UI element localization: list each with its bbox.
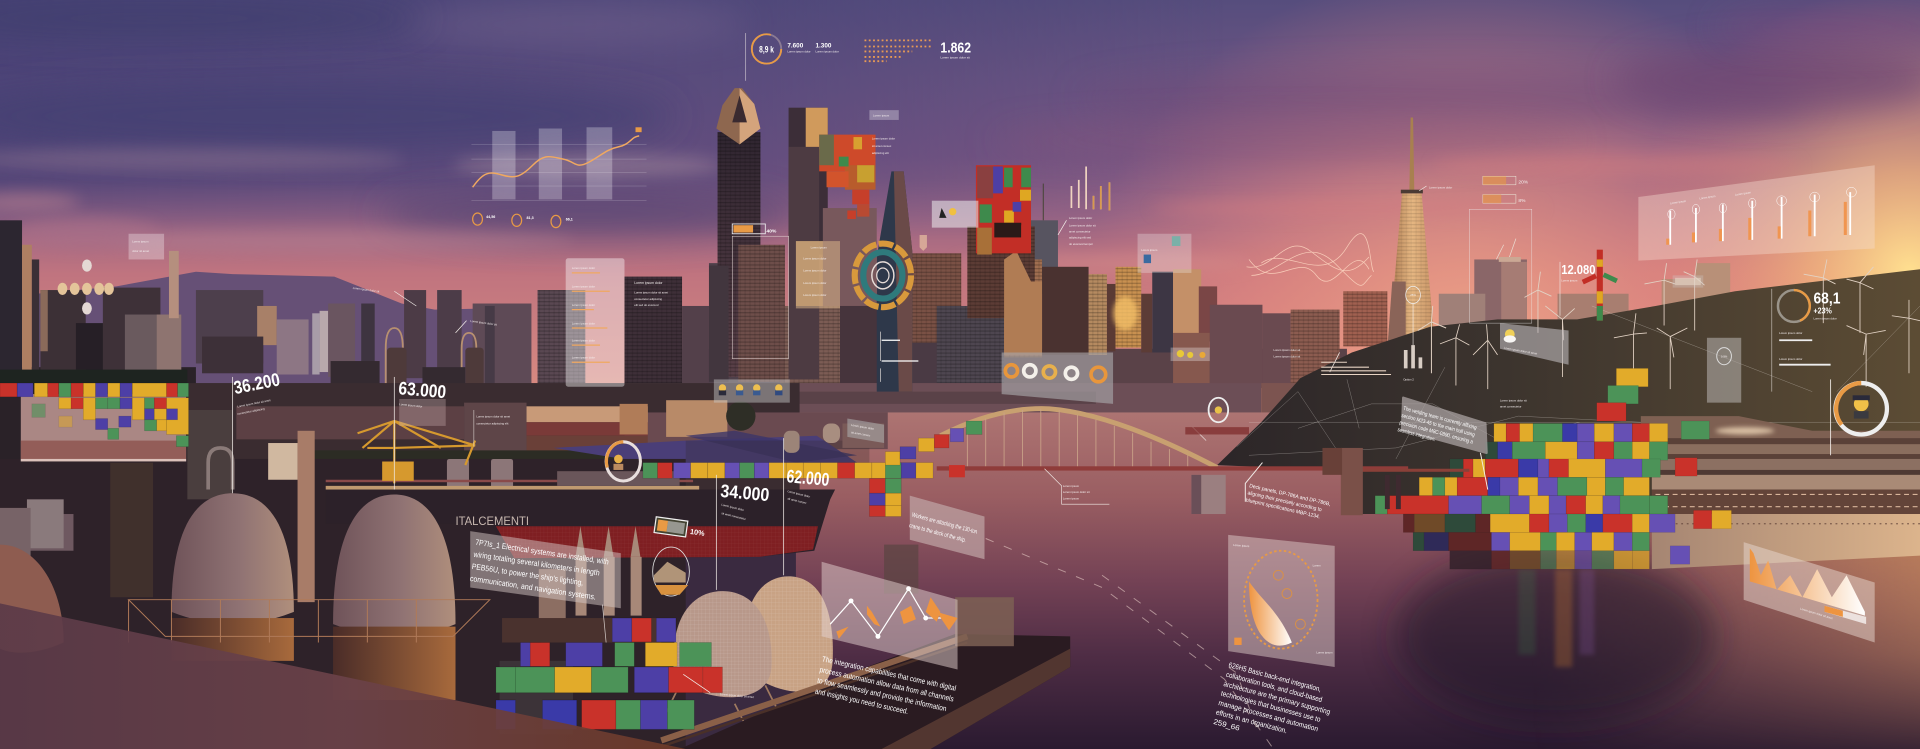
note card <box>129 234 164 259</box>
leader line <box>745 33 747 81</box>
gauges <box>473 213 573 228</box>
speech callout: The welding team is currently affixing <box>1402 406 1477 431</box>
small card: Lorem ipsum dolor <box>851 423 874 431</box>
text block: consectetur adipiscing <box>634 297 662 301</box>
panel: Lorem ipsum dolor <box>803 281 827 285</box>
panel: circular gauge: Lorem ipsum <box>1316 651 1333 655</box>
avatar ring <box>1831 379 1887 455</box>
stat 7.600: 7.600 <box>787 43 804 50</box>
panel: Lorem ipsum dolor <box>803 293 827 297</box>
balloon <box>920 235 927 251</box>
HUD: line chart with bars <box>471 127 647 228</box>
note: back-end integration: 259_66 <box>1212 717 1241 733</box>
mountain gauge <box>653 547 689 596</box>
HUD: hill panels <box>1397 275 1887 490</box>
tower: mid skyscrapers <box>789 108 1042 392</box>
gauge panel: 0.9% <box>1721 354 1728 358</box>
label on lego pile <box>683 674 754 699</box>
stat 1.862: Lorem ipsum dolor sit <box>940 56 970 60</box>
speech callout: section M23-45 to the main hull using <box>1400 413 1475 438</box>
note card: Lorem ipsum <box>132 239 149 243</box>
donut panel <box>1002 352 1113 404</box>
gas domes <box>0 493 490 700</box>
note: integration capabilities: to flow seamlessly and provide the information <box>816 676 947 713</box>
mountains <box>37 272 514 386</box>
HUD: bars & text near lego tower <box>1058 166 1414 382</box>
wind turbines <box>1418 259 1920 389</box>
note: back-end integration: technologies that businesses use to <box>1220 689 1322 724</box>
note: back-end integration: architecture are the primary supporting <box>1223 679 1331 716</box>
lego island stack <box>1375 368 1731 569</box>
panel: Lorem ipsum dolor <box>803 256 827 260</box>
lego facade on tower <box>819 135 876 219</box>
progress bars <box>882 340 918 361</box>
panel: map line chart <box>822 562 958 669</box>
text block: Lorem ipsum dolor sit amet <box>634 291 668 295</box>
text callout: Lorem ipsum dolor sit <box>1273 354 1300 358</box>
ring <box>1406 286 1420 348</box>
panel: Lorem ipsum <box>811 245 827 249</box>
stat 7.600: Lorem ipsum dolor <box>787 50 811 54</box>
panel: list with sliders: Lorem ipsum dolor <box>572 266 595 270</box>
panel: list with sliders: Lorem ipsum dolor <box>572 356 595 360</box>
note: amet consectetur <box>1500 405 1522 409</box>
text: adipiscing elit <box>872 151 889 155</box>
KPI: 34.000: Lorem ipsum dolor <box>721 503 744 512</box>
spire label: Lorem ipsum dolor <box>1429 185 1452 189</box>
HUD panel: top right bar chart: Lorem ipsum <box>1670 199 1687 205</box>
speech callout: seamless integration. <box>1397 427 1436 443</box>
row 7 <box>1413 532 1649 551</box>
KPI: 36.200 <box>232 369 282 493</box>
speech callout <box>1397 398 1488 490</box>
battery 10% <box>654 517 706 540</box>
foreground translucent panel <box>0 603 686 749</box>
stat 1.300: Lorem ipsum dolor <box>816 50 839 54</box>
row 2 <box>1485 442 1668 460</box>
wire-frame spheres <box>661 576 833 728</box>
batteries: 20% <box>1518 180 1529 186</box>
note: integration capabilities: The integration capabilities that come with digital <box>821 654 957 693</box>
gauges: 44,56 <box>486 215 495 219</box>
lego pile <box>496 618 722 729</box>
note <box>1500 398 1527 409</box>
panel: list with sliders: Lorem ipsum dolor <box>572 285 595 289</box>
note: integration capabilities: and insights you need to succeed. <box>814 687 909 716</box>
stat 68,1: Lorem ipsum dolor <box>1813 316 1837 320</box>
card: Lorem ipsum <box>873 113 890 117</box>
HUD panel: top right bar chart: Lorem ipsum <box>1735 190 1752 197</box>
panel: workers note <box>908 496 984 559</box>
mini avatar <box>1209 398 1228 422</box>
small text <box>474 410 510 447</box>
tower: spire skyscraper <box>1387 117 1435 349</box>
bridge annotations: Lorem ipsum <box>1063 484 1080 488</box>
small text: consectetur adipiscing elit <box>476 422 509 426</box>
stat 1.300: 1.300 <box>816 43 832 50</box>
KPI: 36.200: Lorem ipsum dolor sit amet <box>237 398 271 409</box>
row 8 <box>1450 551 1649 569</box>
note: back-end integration: manage processes and automation <box>1218 698 1319 733</box>
stat 1.300 <box>816 43 839 54</box>
stat 68,1 <box>1772 289 1841 392</box>
text callout: Lorem ipsum dolor sit <box>1273 348 1300 352</box>
lego cross on hillside <box>1582 250 1618 321</box>
chemical tanks <box>331 328 484 392</box>
12.080: Lorem ipsum <box>1561 278 1578 282</box>
port crane <box>358 421 475 483</box>
battery 10%: 10% <box>689 527 706 538</box>
dot matrix <box>864 40 931 61</box>
bridge annotations: Lorem ipsum dolor sit <box>1063 490 1090 494</box>
row 4 <box>1419 477 1649 496</box>
label on lego pile: Lorem ipsum dolor sit amet <box>720 692 754 699</box>
stat 1.862: 1.862 <box>940 41 971 57</box>
KPI: 62.000: 62.000 <box>786 465 830 490</box>
12.080 <box>1560 262 1596 316</box>
clouds <box>0 0 1920 273</box>
frame <box>1469 209 1532 323</box>
bulb gauges <box>58 259 114 315</box>
panel: workers note: crane to the deck of the ship. <box>908 522 967 544</box>
panel: list with sliders: Lorem ipsum dolor <box>572 303 595 307</box>
panel: list with sliders <box>566 258 624 387</box>
battery <box>732 224 777 235</box>
cargo ship <box>326 471 835 558</box>
cruise ship <box>1641 416 1920 569</box>
sky background <box>0 0 1920 412</box>
spire label <box>1419 185 1452 191</box>
panel: circular gauge <box>1228 535 1335 667</box>
KPI: 34.000: 34.000 <box>720 480 770 505</box>
note: back-end integration <box>1212 660 1336 749</box>
ring: 25% <box>1410 293 1416 297</box>
text: Lorem ipsum dolor sit <box>1069 223 1096 227</box>
panel: electrical systems note: communication, and navigation systems. <box>469 574 597 602</box>
avatar <box>606 442 640 481</box>
radial dial <box>855 244 911 307</box>
icon panel <box>1171 348 1210 361</box>
small text: Lorem ipsum dolor sit amet <box>476 414 510 418</box>
dock platform <box>661 545 1070 749</box>
stat 7.600 <box>787 43 811 54</box>
text: Lorem ipsum dolor <box>1069 216 1092 220</box>
gauges: 66,1 <box>566 217 573 221</box>
HUD: callouts near left city <box>58 234 668 387</box>
bridge piers <box>1191 448 1401 515</box>
bridge annotations <box>1044 427 1331 522</box>
crane building <box>1496 239 1521 262</box>
city skyline: central towers <box>624 184 1730 415</box>
panel: area chart: Lorem ipsum dolor sit amet <box>1800 607 1833 620</box>
frame <box>732 236 789 359</box>
panel: Lorem ipsum dolor <box>803 269 827 273</box>
panel: electrical systems note: 7P7Is_1 Electrical systems are installed, with <box>475 538 609 566</box>
left factory ground <box>0 410 686 749</box>
note: back-end integration: efforts in an organization. <box>1215 708 1288 735</box>
text <box>1058 216 1096 246</box>
row 6 <box>1403 514 1675 532</box>
lego tower top <box>976 165 1031 255</box>
small card <box>847 419 884 443</box>
panel: circular gauge: Lorem <box>1313 564 1321 568</box>
mini bars <box>1406 345 1420 368</box>
callout lines <box>879 332 881 382</box>
text: do eiusmod tempor <box>1069 242 1093 246</box>
panel: list with sliders: Lorem ipsum dolor <box>572 321 595 325</box>
stat 68,1: 68,1 <box>1813 291 1841 308</box>
silos and stacks <box>500 526 661 734</box>
bridge annotations: Lorem ipsum <box>1063 496 1080 500</box>
gauge panel <box>1707 338 1741 403</box>
KPI: 36.200: 36.200 <box>232 369 282 398</box>
bridge annotations: Deck panels, DP-786A and DP-786B, <box>1249 483 1331 508</box>
HUD panel: top right bar chart: Lorem ipsum <box>1699 194 1716 200</box>
HUD: top KPI strip <box>746 33 971 81</box>
panel: electrical systems note: PEB56U, to power the ship's lighting, <box>471 562 584 587</box>
ring 8,9 k: 8,9 k <box>759 45 775 55</box>
KPI: 62.000 <box>784 438 830 575</box>
KPI: 62.000: sit amet consec <box>787 496 808 505</box>
text lines <box>1321 362 1391 374</box>
tower: twin crown skyscraper <box>709 88 785 382</box>
arched bridge <box>937 409 1469 515</box>
text callout <box>1273 348 1340 372</box>
bridge annotations: aligning their precisely according to <box>1247 490 1322 513</box>
speech callout: precision code M8C-0890, ensuring a <box>1399 420 1474 446</box>
panel: workers note: Workers are attaching the 130-ton <box>911 512 978 536</box>
text: sit amet consec <box>872 144 892 148</box>
river water <box>796 412 1920 749</box>
lego bridge row <box>643 421 982 516</box>
panel: list with sliders: Lorem ipsum dolor <box>572 338 595 342</box>
lego panel left <box>0 383 189 461</box>
HUD: bars & text near lego tower: Option 2 <box>1403 378 1414 382</box>
KPI: 36.200: consectetur adipiscing <box>237 407 265 416</box>
KPI: 34.000 <box>716 475 770 590</box>
KPI: 62.000: Lorem ipsum dolor <box>787 489 811 499</box>
text block: Lorem ipsum dolor <box>634 281 663 285</box>
row 3 <box>1450 459 1660 477</box>
text: adipiscing elit sed <box>1069 236 1092 240</box>
note: back-end integration: 626H5 Basic back-end integration, <box>1228 660 1322 694</box>
note: integration capabilities: process automation allow data from all channels <box>819 665 955 704</box>
12.080: 12.080 <box>1561 262 1596 277</box>
callout: Lorem ipsum dolor sit <box>470 319 497 327</box>
hill with wind farm <box>1217 259 1920 514</box>
wave chart <box>1247 234 1374 285</box>
battery <box>1673 275 1703 288</box>
text: Lorem ipsum dolor <box>872 137 895 141</box>
note: back-end integration: collaboration tools, and cloud-based <box>1225 670 1323 704</box>
panel: area chart <box>1744 542 1875 643</box>
text <box>872 137 895 155</box>
card <box>869 110 899 120</box>
panel: electrical systems note <box>469 531 621 643</box>
row 5 <box>1375 496 1668 514</box>
panel: circular gauge: Lorem ipsum <box>1233 543 1250 548</box>
panel <box>796 241 840 308</box>
bridge annotations: blueprint specifications MBP-1234. <box>1245 498 1321 520</box>
note: integration capabilities <box>814 654 957 725</box>
ring 8,9 k <box>752 34 781 64</box>
stat 68,1: +23% <box>1813 305 1832 315</box>
icon cards <box>932 201 978 228</box>
HUD: tower battery and frames <box>732 110 978 382</box>
HUD panel: top right bar chart <box>1638 165 1875 261</box>
avatars panel <box>714 379 790 403</box>
weather panel: Lorem ipsum dolor sit amet <box>1503 346 1538 356</box>
KPI: 63.000: Lorem ipsum dolor <box>399 402 423 409</box>
stat 68,1: Lorem ipsum dolor <box>1779 331 1802 335</box>
batteries: 8% <box>1518 198 1526 204</box>
note: Lorem ipsum dolor sit <box>1500 398 1527 402</box>
KPI: 63.000 <box>394 377 447 490</box>
ship name: ITALCEMENTI <box>456 514 529 528</box>
panel: Lorem ipsum <box>1141 248 1158 252</box>
weather panel <box>1500 323 1569 365</box>
text block: elit sed do eiusmod <box>634 303 659 307</box>
panel <box>1138 234 1191 273</box>
note card: dolor sit amet <box>132 249 149 253</box>
KPI: 34.000: sit amet consectetur <box>721 511 746 521</box>
KPI: 63.000: 63.000 <box>398 377 447 402</box>
small card: sit amet consec <box>851 430 871 438</box>
battery: 40% <box>767 229 777 235</box>
text: amet consectetur <box>1069 230 1091 234</box>
callout <box>353 286 416 306</box>
mid ground port island <box>187 383 888 496</box>
HUD: centre panels <box>474 352 1228 481</box>
loose bricks <box>1597 368 1731 564</box>
batteries <box>1483 176 1529 204</box>
shipping lane dashed markers <box>986 538 1273 749</box>
row 1 <box>1494 423 1668 442</box>
city skyline: left industrial <box>0 220 585 465</box>
gauges: 81,3 <box>527 216 534 220</box>
panel: electrical systems note: wiring totaling several kilometers in length <box>472 550 600 578</box>
callout: Lorem ipsum dolor sit <box>353 286 380 294</box>
HUD: tower gauges and battery <box>1406 176 1596 368</box>
stat 68,1: Lorem ipsum dolor <box>1779 357 1802 361</box>
callout <box>456 319 497 333</box>
text block <box>634 281 668 307</box>
